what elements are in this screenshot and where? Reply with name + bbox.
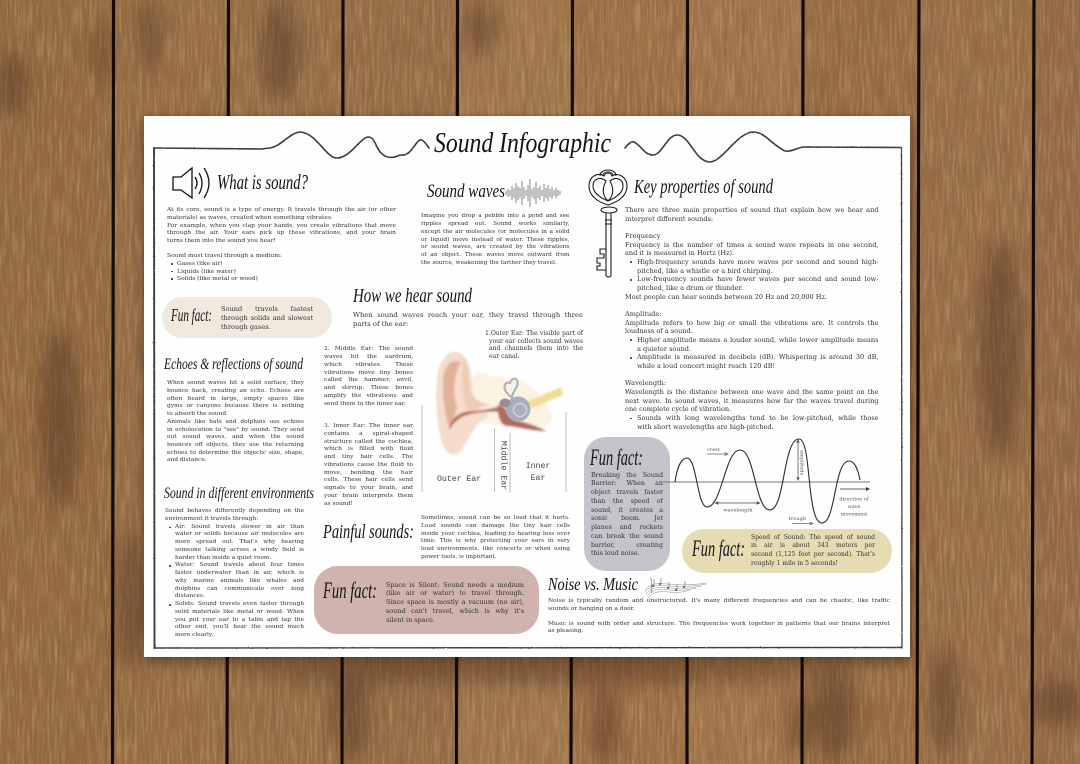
text: outer ear: 1.Outer Ear: The visible part of — [485, 330, 583, 337]
chart: wave diagram — [663, 438, 870, 526]
label: amplitude — [797, 440, 804, 480]
text: middle ear: send them to the inner ear. — [324, 400, 406, 407]
title: Sound Infographic — [434, 128, 611, 159]
text: speed of sound: second (1,125 feet per second). That's — [751, 551, 875, 558]
text: breaking the sound barrier: object travels faster — [591, 489, 663, 496]
panel: key properties of sound — [588, 170, 878, 431]
label: wavelength — [716, 502, 760, 514]
text: key properties: while a loud concert might reach 120 dB! — [637, 362, 775, 370]
text: echoes: out sound waves, and when the sound — [167, 434, 304, 440]
text: how we hear intro — [353, 311, 583, 328]
text: space is silent — [386, 581, 524, 624]
text: breaking the sound barrier: can break the sound — [591, 533, 663, 540]
text: environments: why marine animals like whales and — [175, 578, 304, 584]
icon: waveform — [505, 179, 561, 207]
label: direction of wave movement: wave — [847, 504, 861, 510]
text: key properties: next wave. In sound waves, it measures how far the waves travel during — [625, 397, 878, 405]
text: intro paragraphs: For example, when you clap your hands, you create vibrations that move — [167, 222, 396, 229]
text: space is silent: silent in space. — [386, 616, 435, 624]
panel: what is sound — [167, 166, 396, 282]
heading: fun fact: Fun fact: — [589, 445, 643, 470]
text: key properties: loudness of a sound. — [625, 327, 693, 335]
text: middle ear: and stirrup. These bones — [324, 384, 413, 391]
divider lines — [422, 405, 566, 492]
callout: fun fact pink — [314, 566, 539, 634]
text: environments: more spread out. That's why hearing — [175, 539, 304, 545]
text: inner ear: move, bending the hair — [324, 469, 413, 476]
panel: noise vs music — [547, 574, 891, 637]
text: key properties: Amplitude is measured in decibels (dB). Whispering is around 30 dB, — [637, 353, 878, 361]
text: environments: environment it travels through: — [165, 516, 258, 522]
text: space is silent: (like air or water) to travel through. — [386, 589, 524, 597]
text: echoes — [167, 380, 304, 463]
text: intro paragraphs: Liquids (like water) — [177, 268, 236, 275]
text: intro paragraphs: through the air. Your ears pick up these vibrations, and your brain — [167, 229, 396, 236]
text: inner ear: cells. These hair cells send — [324, 476, 413, 483]
text: key properties: a quieter sound. — [637, 345, 691, 353]
text: key properties: pitched, like a drum or thunder. — [637, 284, 743, 292]
panel: how we hear sound — [324, 285, 584, 507]
text: painful sounds: Loud sounds can damage the tiny hair cells — [421, 523, 570, 529]
heading: sound waves: Sound waves — [427, 181, 505, 202]
text: middle ear: which vibrates. These — [324, 361, 413, 368]
text: breaking the sound barrier: Barrier: When an — [591, 480, 663, 487]
text: environments — [165, 508, 304, 638]
text: painful sounds: Sometimes, sound can be so loud that it hurts. — [421, 515, 570, 521]
ear diagram — [422, 350, 566, 492]
text: fun fact: through solids and slowest — [221, 314, 313, 322]
label: wavelength: wavelength — [723, 508, 753, 514]
text: how we hear intro: parts of the ear: — [353, 320, 408, 328]
text: echoes: and distance. — [167, 457, 207, 463]
icon: key — [588, 170, 628, 278]
text: environments: Solids: Sound travels even faster through — [175, 601, 304, 607]
text: painful sounds: time. This is why protecting your ears in very — [421, 538, 570, 544]
text: sound waves: the source, weakening the farther they travel. — [421, 260, 557, 266]
text: noise vs music: Noise is typically random and unstructured. It's many different frequencies and can be chaotic, like traffic — [548, 598, 890, 604]
text: speed of sound: Speed of Sound: The speed of sound — [751, 534, 875, 541]
text: inner ear: and tiny hair cells. The — [324, 453, 413, 460]
text: inner ear: 3. Inner Ear: The inner ear — [324, 422, 413, 429]
text: intro paragraphs: materials) as waves, created when something vibrates. — [167, 214, 333, 221]
label: crest — [707, 447, 728, 456]
text: key properties: Wavelength: — [625, 379, 666, 387]
label: direction of wave movement — [839, 487, 870, 518]
heading: fun fact: Fun fact: — [170, 305, 212, 325]
text: sound waves — [421, 213, 570, 266]
heading: painful sounds: Painful sounds: — [322, 521, 414, 543]
heading: how we hear sound: How we hear sound — [352, 285, 473, 307]
text: outer ear: and channels them into the — [489, 345, 583, 352]
text: key properties — [624, 206, 878, 431]
text: how we hear intro: When sound waves reach your ear, they travel through three — [353, 311, 583, 319]
text: breaking the sound barrier: than the speed of — [591, 498, 663, 505]
text: environments: solid materials like metal or wood. When — [175, 609, 304, 615]
text: space is silent: Space is Silent: Sound needs a medium — [386, 581, 524, 589]
text: middle ear: waves hit the eardrum, — [324, 353, 413, 360]
text: intro paragraphs: Solids (like metal or wood) — [177, 275, 258, 282]
text: environments: someone talking across a windy field is — [175, 547, 304, 553]
callout: fun fact yellow — [682, 529, 892, 573]
text: outer ear: ear canal. — [489, 353, 520, 360]
heading: key properties: Key properties of sound — [633, 176, 774, 198]
icon: music staff — [644, 575, 707, 599]
text: inner ear: structure called the cochlea, — [324, 438, 413, 445]
text: inner ear — [324, 422, 413, 507]
text: sound waves: of an object. These waves move outward from — [421, 252, 570, 258]
panel: sound in different environments — [164, 485, 314, 638]
text: intro paragraphs: turns them into the sound you hear! — [167, 237, 276, 244]
text: middle ear: vibrations move tiny bones — [324, 369, 413, 376]
text: key properties: Higher amplitude means a louder sound, while lower amplitude means — [637, 336, 878, 344]
illustration: ear anatomy — [435, 350, 564, 456]
text: sound waves: or sound waves, are created by the vibrations — [421, 244, 570, 250]
text: fun fact — [221, 305, 313, 331]
text: noise vs music — [548, 598, 890, 636]
text: inner ear: contains a spiral-shaped — [324, 430, 413, 437]
text: key properties: with short wavelengths are high-pitched. — [637, 423, 774, 431]
heading: echoes: Echoes & reflections of sound — [163, 356, 304, 373]
text: environments: distances. — [175, 593, 205, 599]
text: environments: more clearly. — [175, 632, 213, 638]
text: intro paragraphs — [167, 206, 396, 282]
text: painful sounds: loud environments, like concerts or when using — [421, 546, 570, 552]
text: environments: water or solids because air molecules are — [175, 531, 304, 537]
label: inner ear: Ear — [531, 474, 545, 483]
label: middle ear: Middle Ear — [498, 441, 508, 490]
text: environments: Air: Sound travels slower in air than — [175, 524, 304, 530]
text: intro paragraphs: Sound must travel through a medium: — [167, 252, 282, 259]
text: key properties: Most people can hear sounds between 20 Hz and 20,000 Hz. — [625, 293, 827, 301]
text: inner ear: signals to your brain, and — [324, 484, 413, 491]
heading: fun fact: Fun fact: — [691, 536, 745, 561]
label: inner ear: Inner — [526, 462, 550, 471]
text: speed of sound: in air is about 343 meters per — [751, 542, 875, 549]
text: key properties: Frequency is the number of times a sound wave repeats in one second, — [625, 241, 878, 249]
text: echoes: gyms or canyons because there is nothing — [167, 403, 304, 409]
text: painful sounds: power tools, is important. — [421, 554, 497, 560]
label: crest: crest — [707, 447, 720, 453]
text: key properties: one complete cycle of vibration. — [625, 405, 731, 413]
text: sound waves: except the air molecules (or molecules in a solid — [421, 229, 570, 235]
label: direction of wave movement: direction of — [839, 496, 870, 502]
text: outer ear: your ear collects sound waves — [489, 338, 583, 345]
text: key properties: and it is measured in Hertz (Hz). — [625, 249, 734, 257]
text: key properties: interpret different sounds: — [625, 215, 713, 223]
label: trough — [789, 516, 813, 525]
text: echoes: When sound waves hit a solid surface, they — [167, 380, 304, 386]
text: inner ear: vibrations cause the fluid to — [324, 461, 413, 468]
text: environments: Water: Sound travels about four times — [175, 562, 304, 568]
text: breaking the sound barrier: sonic boom. Jet — [591, 515, 663, 522]
text: breaking the sound barrier: Breaking the Sound — [591, 472, 663, 479]
label: trough: trough — [789, 516, 807, 522]
text: echoes: bounce back, creating an echo. Echoes are — [167, 388, 304, 394]
panel: echoes and reflections — [163, 356, 304, 463]
text: environments: you put your ear to a table and tap the — [175, 617, 304, 623]
text: breaking the sound barrier: this loud noise. — [591, 550, 640, 557]
text: environments: faster underwater than in air, which is — [175, 570, 304, 576]
text: middle ear: amplify the vibrations and — [324, 392, 413, 399]
text: painful sounds — [421, 515, 570, 560]
label: inner ear — [526, 462, 550, 483]
text: environments: Sound behaves differently depending on the — [165, 508, 304, 514]
text: noise vs music: sounds or banging on a door. — [548, 606, 635, 612]
text: key properties: Frequency — [625, 232, 660, 240]
text: noise vs music: as pleasing. — [548, 628, 583, 634]
text: echoes: Animals like bats and dolphins use echoes — [167, 419, 304, 425]
text: key properties: Amplitude: — [625, 310, 661, 318]
callout: fun fact beige — [162, 297, 332, 338]
text: sound waves: or liquid) move instead of water. These ripples, — [421, 237, 570, 243]
text: inner ear: your brain interprets them — [324, 492, 413, 499]
paper sheet — [144, 116, 910, 657]
text: space is silent: sound can't travel, which is why it's — [386, 607, 524, 615]
text: key properties: Sounds with long wavelengths tend to be low-pitched, while those — [637, 414, 878, 422]
text: key properties: There are three main properties of sound that explain how we hear and — [625, 206, 878, 214]
callout: fun fact grey — [584, 437, 670, 571]
icon: speaker — [172, 166, 210, 200]
text: echoes: to absorb the sound. — [167, 411, 228, 417]
text: sound waves: Imagine you drop a pebble into a pond and see — [421, 213, 570, 219]
text: fun fact: through gases. — [221, 323, 271, 331]
heading: environments: Sound in different environments — [164, 485, 314, 502]
label: outer ear: Outer Ear — [437, 474, 481, 484]
text: environments: dolphins can communicate over long — [175, 586, 304, 592]
text: painful sounds: inside your cochlea, leading to hearing loss over — [421, 531, 570, 537]
text: key properties: Low-frequency sounds have fewer waves per second and sound low- — [637, 275, 878, 283]
axis and waveform — [663, 439, 870, 523]
label: amplitude: amplitude — [798, 450, 804, 476]
text: fun fact: Sound travels fastest — [221, 305, 313, 313]
text: key properties: High-frequency sounds have more waves per second and sound high- — [637, 258, 878, 266]
text: echoes: often heard in large, empty spaces like — [167, 396, 304, 402]
text: intro paragraphs: At its core, sound is a type of energy. It travels through the air (or other — [167, 206, 396, 213]
text: space is silent: Since space is mostly a vacuum (no air), — [386, 598, 524, 606]
text: breaking the sound barrier: planes and rockets — [591, 524, 663, 531]
text: environments: other end, you'll hear the sound much — [175, 624, 304, 630]
text: intro paragraphs: Gases (like air) — [177, 260, 222, 267]
panel: painful sounds — [322, 515, 570, 560]
heading: fun fact: Fun fact: — [322, 578, 377, 603]
text: breaking the sound barrier — [591, 472, 664, 557]
text: noise vs music: Music is sound with order and structure. The frequencies work together in patterns that our brains interpret — [548, 621, 890, 627]
panel: sound waves — [421, 179, 570, 266]
text: outer ear — [485, 330, 584, 360]
text: inner ear: as sound! — [324, 500, 353, 507]
text: echoes: echoes to determine the objects' size, shape, — [167, 450, 304, 456]
text: key properties: pitched, like a whistle or a bird chirping. — [637, 267, 773, 275]
text: key properties: Wavelength is the distance between one wave and the same point on the — [625, 388, 878, 396]
text: breaking the sound barrier: sound, it creates a — [591, 507, 663, 514]
text: middle ear: 2. Middle Ear: The sound — [324, 345, 413, 352]
text: environments: harder than inside a quiet room. — [175, 555, 271, 561]
text: echoes: in echolocation to "see" by sound. They send — [167, 426, 304, 432]
text: breaking the sound barrier: barrier, creating — [591, 542, 663, 549]
text: sound waves: ripples spread out. Sound works similarly, — [421, 221, 570, 227]
text: speed of sound: roughly 1 mile in 5 seconds! — [751, 560, 838, 567]
heading: noise vs music: Noise vs. Music — [547, 574, 638, 594]
text: echoes: bounces off objects, they use the returning — [167, 442, 304, 448]
text: key properties: Amplitude refers to how big or small the vibrations are. It controls the — [625, 319, 878, 327]
text: inner ear: which is filled with fluid — [324, 445, 413, 452]
text: speed of sound — [751, 534, 875, 569]
text: middle ear: called the hammer, anvil, — [324, 376, 413, 383]
heading: what is sound: What is sound? — [217, 170, 308, 194]
text: middle ear — [324, 345, 413, 407]
label: direction of wave movement: movement — [841, 512, 867, 518]
